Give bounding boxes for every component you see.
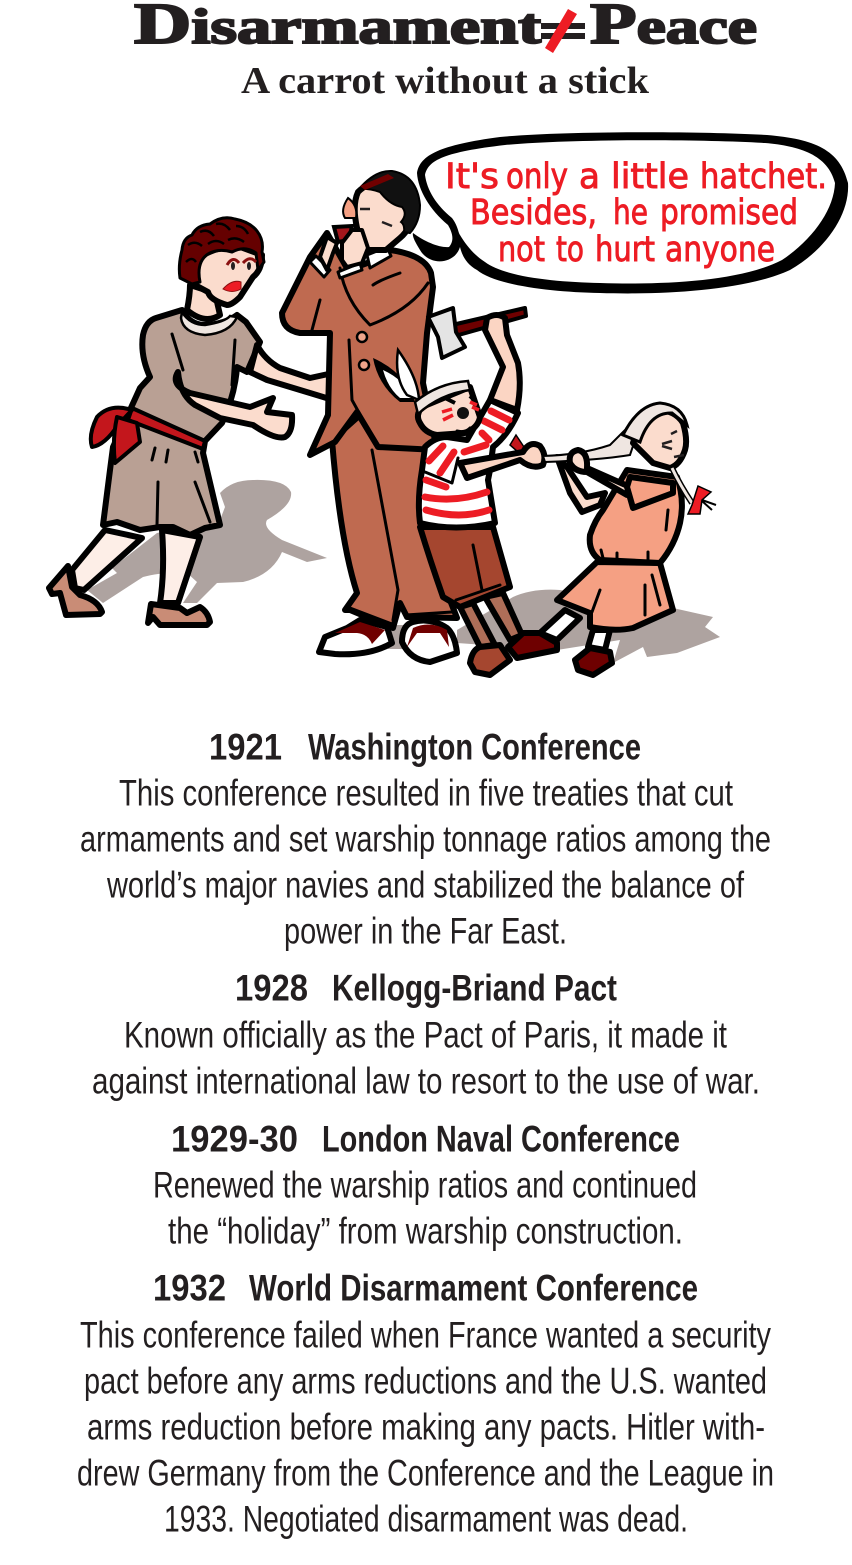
speech text: anyone <box>665 230 775 270</box>
girl figure <box>540 403 716 675</box>
heading 1932: 1932 <box>153 1268 226 1308</box>
speech text: a <box>579 157 600 197</box>
boy raised arm <box>485 315 520 410</box>
woman dress folds <box>152 334 235 525</box>
body 1921: power in the Far East. <box>284 910 567 952</box>
skirt folds <box>592 575 660 615</box>
body 1921 <box>80 772 771 952</box>
man eyes <box>360 209 392 226</box>
bodice folds <box>601 510 668 560</box>
speech text: to <box>556 230 584 270</box>
cartoon illustration <box>49 132 848 675</box>
speech text: Besides, <box>470 193 597 233</box>
heading 1928 <box>235 968 617 1008</box>
pulled hair <box>543 425 640 462</box>
heading 1932: World Disarmament Conference <box>249 1268 698 1308</box>
man hair <box>359 171 420 233</box>
speech text: hatchet. <box>700 157 827 197</box>
heading 1928: 1928 <box>235 968 308 1008</box>
heading 1921: Washington Conference <box>308 726 641 768</box>
heading 1921 <box>209 726 641 768</box>
man head <box>355 182 412 250</box>
speech text: he <box>613 193 648 233</box>
girl bodice <box>590 470 682 563</box>
girl far arm <box>557 457 605 512</box>
girl sleeve <box>627 477 673 508</box>
girl shoe <box>575 648 612 675</box>
speech text <box>445 157 827 270</box>
woman legs <box>72 530 200 603</box>
shirt stripes <box>425 411 509 515</box>
girl face <box>662 431 684 457</box>
subtitle: A carrot without a stick <box>241 60 650 102</box>
man hands <box>320 230 368 270</box>
boy head <box>418 387 480 435</box>
woman sash <box>91 408 205 463</box>
man shoes <box>319 620 457 662</box>
boy sleeve edge <box>425 458 458 483</box>
title <box>134 0 757 56</box>
boy legs <box>460 593 522 647</box>
speech text: little <box>611 157 689 197</box>
section: 1932 World Disarmament Conference <box>77 1268 774 1540</box>
heading 1929-30: 1929-30 <box>171 1118 298 1160</box>
woman arms <box>176 345 350 438</box>
woman dress <box>103 310 260 535</box>
girl legs <box>540 610 610 650</box>
boy shoes <box>470 633 557 675</box>
girl hair <box>623 403 687 442</box>
match flame <box>343 198 356 218</box>
body 1929-30: Renewed the warship ratios and continued <box>153 1164 697 1206</box>
heading 1921: 1921 <box>209 726 282 768</box>
speech text: only <box>506 157 568 197</box>
heading 1929-30: London Naval Conference <box>322 1118 680 1160</box>
pipe <box>334 226 352 242</box>
red hair tuft <box>510 435 526 452</box>
boy figure <box>373 308 557 675</box>
jacket details <box>312 268 428 447</box>
woman hair <box>179 218 264 284</box>
heading 1929-30 <box>171 1118 680 1160</box>
headband <box>415 381 470 414</box>
girl head <box>633 410 686 468</box>
woman shoes <box>49 566 210 625</box>
trouser crease and cuffs <box>350 450 452 624</box>
body 1929-30 <box>153 1164 697 1252</box>
woman head <box>195 245 262 305</box>
speech text: hurt <box>595 230 655 270</box>
man figure <box>282 171 457 662</box>
body 1932 <box>77 1314 774 1540</box>
speech text: It's <box>445 157 499 197</box>
man cuffs and collar <box>310 247 391 278</box>
speech bubble <box>413 132 848 293</box>
boy shirt <box>419 400 518 528</box>
man jacket <box>282 233 437 455</box>
feathers <box>373 350 419 402</box>
girl skirt <box>557 562 673 630</box>
section: 1928 Kellogg-Briand Pact <box>92 968 760 1102</box>
woman collar <box>181 312 237 335</box>
section: 1929-30 London Naval Conference <box>153 1118 697 1252</box>
body 1928 <box>92 1014 760 1102</box>
section: 1921 Washington Conference <box>80 726 771 952</box>
girl near arm and hand <box>570 450 630 495</box>
jacket buttons <box>357 332 369 370</box>
body 1932: 1933. Negotiated disarmament was dead. <box>164 1498 688 1540</box>
boy pulling arm and hand <box>460 444 544 478</box>
ground shadows <box>87 480 720 663</box>
pigtail and bow <box>672 468 716 514</box>
woman figure <box>49 218 350 625</box>
heading 1932 <box>153 1268 698 1308</box>
speech text: not <box>498 230 545 270</box>
hatchet <box>428 308 526 358</box>
heading 1928: Kellogg-Briand Pact <box>332 968 617 1008</box>
speech text: promised <box>660 193 798 233</box>
man trousers <box>332 415 457 628</box>
boy shorts <box>420 527 510 607</box>
boy face <box>442 396 479 432</box>
woman neck <box>187 285 220 319</box>
woman face <box>223 259 256 292</box>
body 1929-30: the “holiday” from warship construction. <box>168 1210 683 1252</box>
